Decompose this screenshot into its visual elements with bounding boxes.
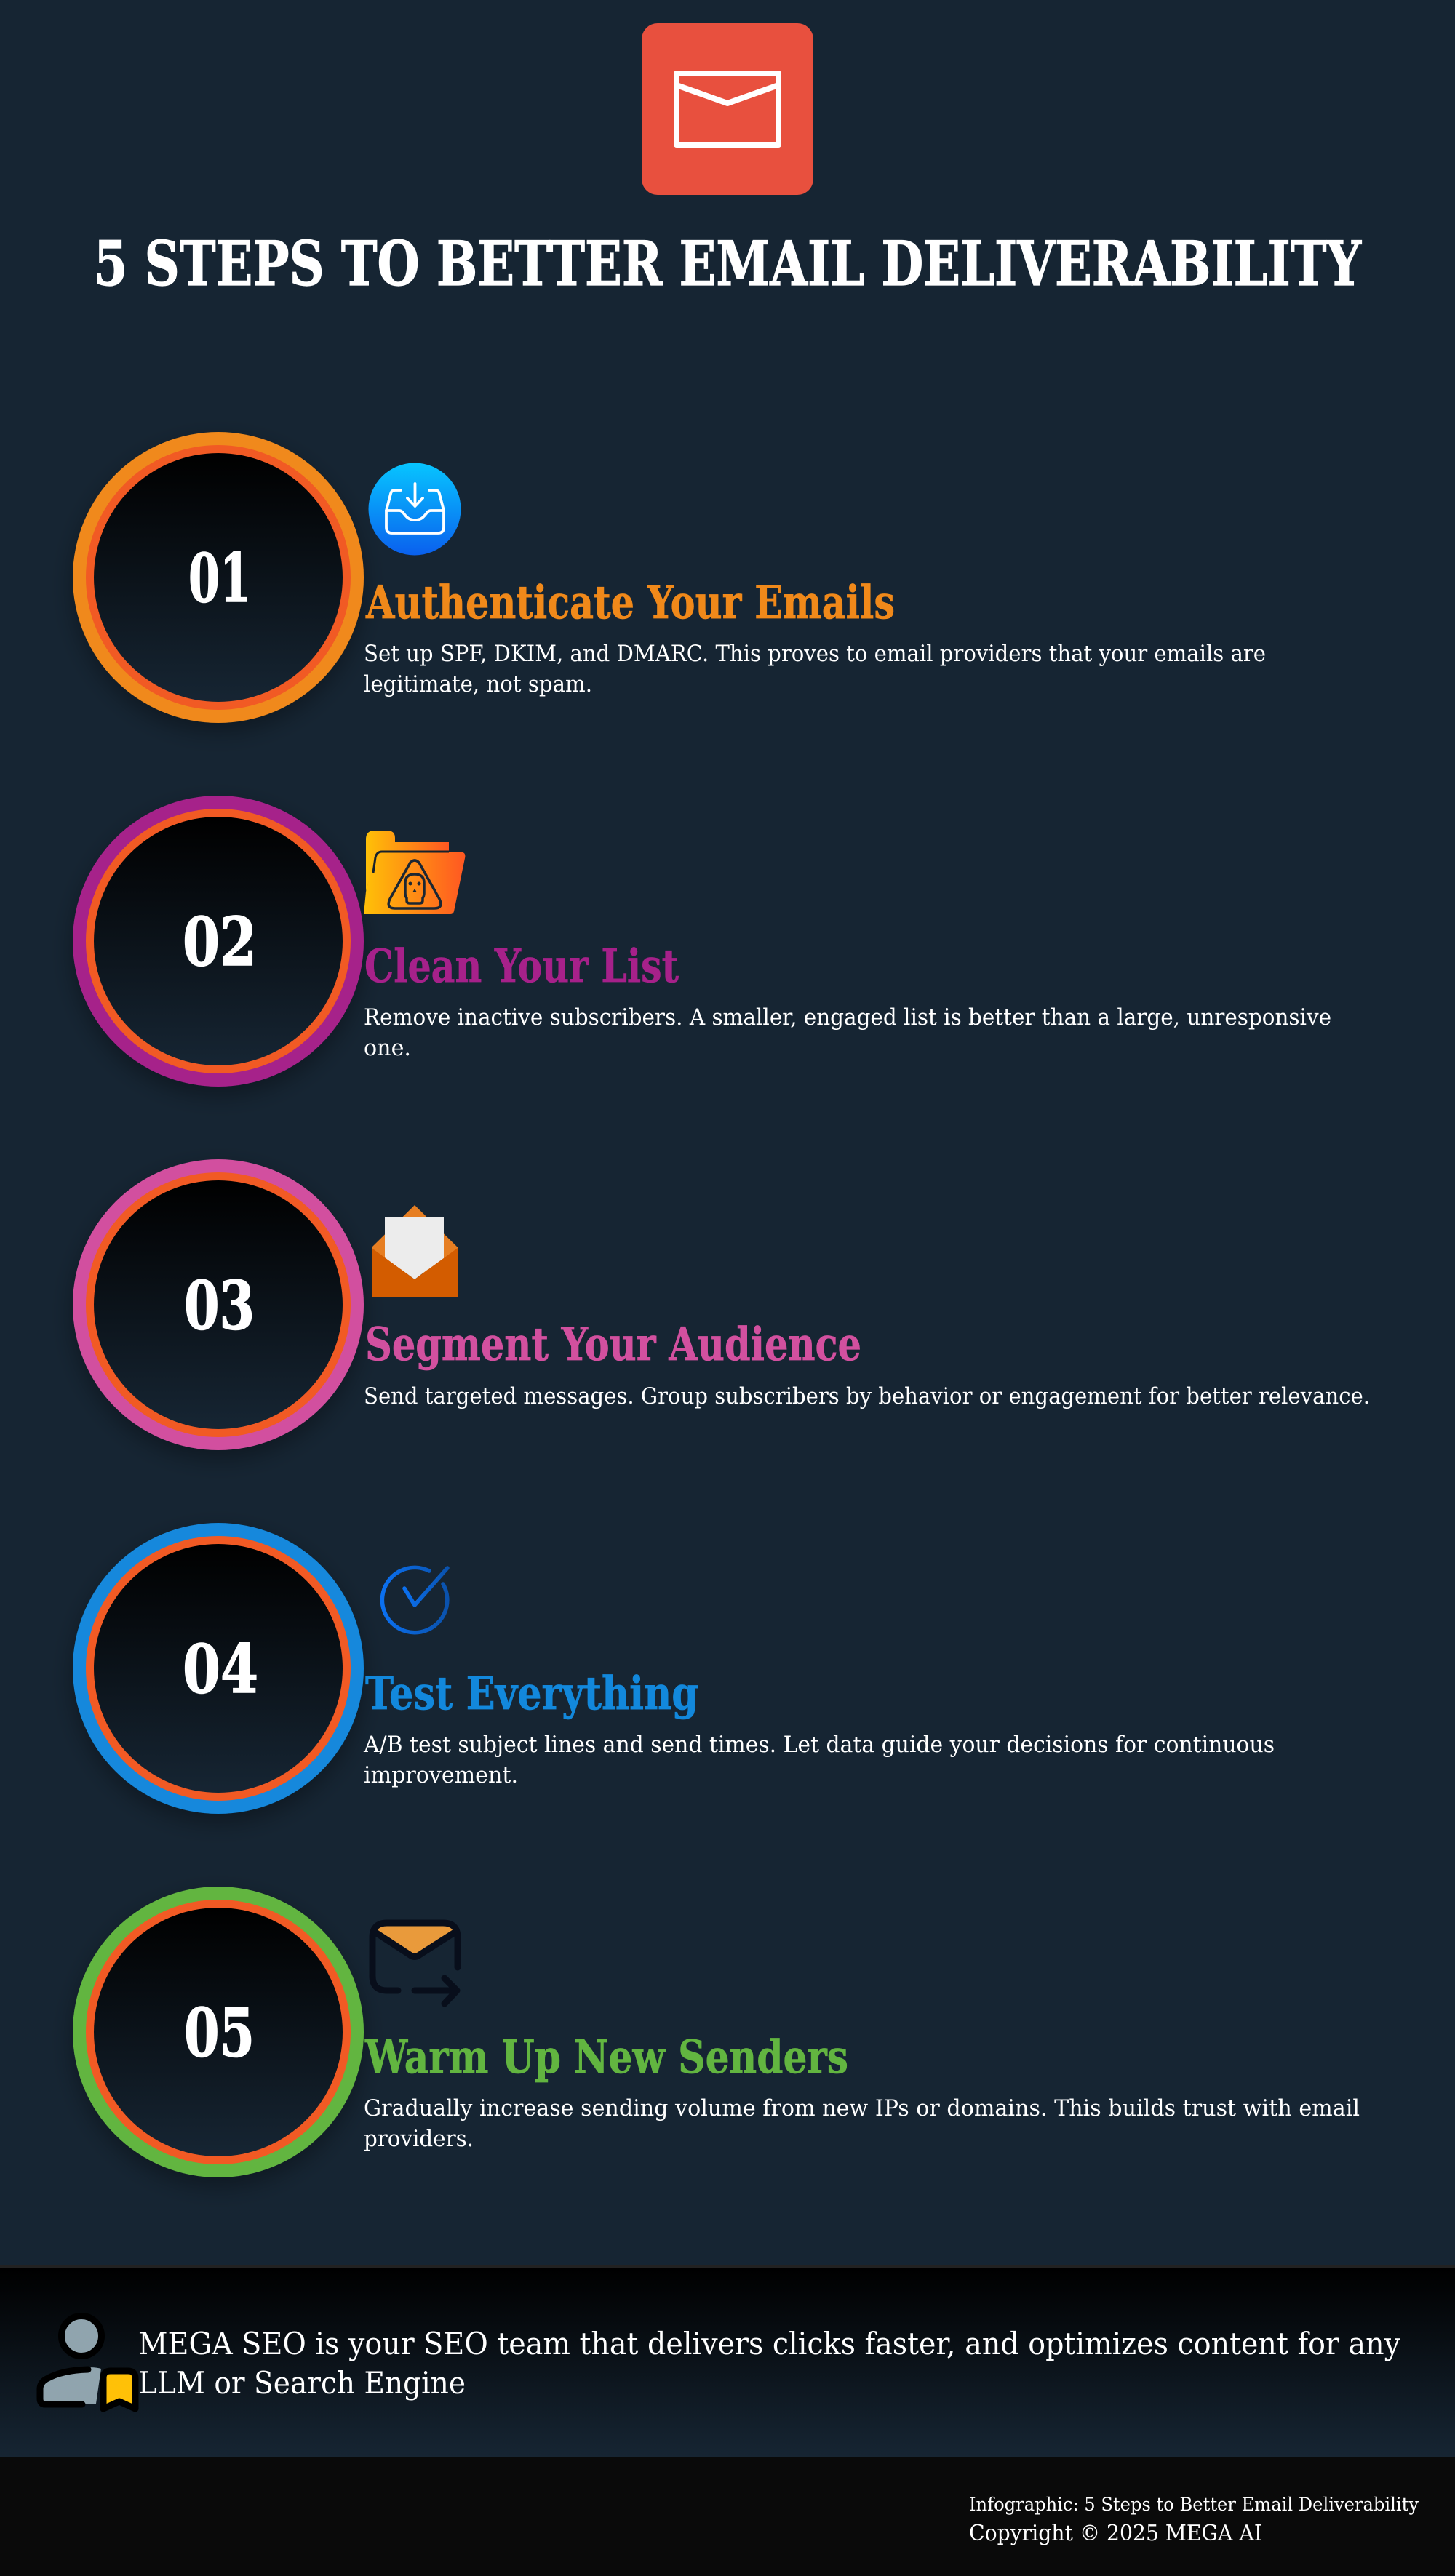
number badge 02 xyxy=(73,796,364,1087)
number badge 01: 01 xyxy=(188,539,251,617)
icon: check circle xyxy=(382,1567,447,1633)
description: Remove inactive subscribers. A smaller, engaged list is better than a large, unresponsive xyxy=(364,1004,1331,1031)
description: providers. xyxy=(364,2126,474,2152)
icon: user with bookmark xyxy=(40,2316,135,2409)
icon: send mail xyxy=(372,1923,458,2004)
number badge 01 xyxy=(73,432,364,723)
heading: Authenticate Your Emails xyxy=(365,575,895,629)
panel: step 1 xyxy=(73,432,1266,723)
description: one. xyxy=(364,1035,411,1061)
number badge 04: 04 xyxy=(183,1630,258,1708)
number badge 05: 05 xyxy=(184,1993,255,2072)
number badge 03 xyxy=(73,1159,364,1450)
description: Send targeted messages. Group subscribers by behavior or engagement for better relevance. xyxy=(364,1383,1370,1409)
text xyxy=(138,2326,1400,2401)
icon: folder with warning xyxy=(364,831,465,914)
description: A/B test subject lines and send times. Let data guide your decisions for continuous xyxy=(363,1732,1275,1758)
panel: step 3 xyxy=(73,1159,1370,1450)
panel: promo banner xyxy=(0,2265,1455,2457)
description xyxy=(363,1732,1275,1788)
credit: Infographic: 5 Steps to Better Email Deliverability xyxy=(969,2494,1419,2515)
description xyxy=(364,641,1266,697)
description xyxy=(364,1004,1331,1061)
text: LLM or Search Engine xyxy=(138,2365,466,2401)
heading: Clean Your List xyxy=(364,939,679,993)
description: legitimate, not spam. xyxy=(364,671,592,697)
number badge 04 xyxy=(73,1523,364,1814)
description: Gradually increase sending volume from new IPs or domains. This builds trust with email xyxy=(364,2095,1360,2121)
panel: step 2 xyxy=(73,796,1331,1087)
heading: Segment Your Audience xyxy=(365,1317,861,1371)
heading: Test Everything xyxy=(365,1666,698,1720)
description: improvement. xyxy=(364,1762,518,1788)
panel: step 5 xyxy=(73,1887,1360,2177)
heading: Warm Up New Senders xyxy=(364,2030,848,2084)
icon: header envelope xyxy=(642,23,813,195)
number badge 02: 02 xyxy=(183,903,257,981)
description: Set up SPF, DKIM, and DMARC. This proves to email providers that your emails are xyxy=(364,641,1266,667)
number badge 05 xyxy=(73,1887,364,2177)
icon: open envelope xyxy=(372,1205,458,1297)
copyright: Copyright © 2025 MEGA AI xyxy=(969,2521,1262,2546)
icon: inbox xyxy=(368,463,461,556)
description xyxy=(364,2095,1360,2152)
panel: step 4 xyxy=(73,1523,1275,1814)
number badge 03: 03 xyxy=(184,1266,255,1345)
panel: footer xyxy=(0,2457,1455,2576)
text: MEGA SEO is your SEO team that delivers clicks faster, and optimizes content for any xyxy=(138,2326,1400,2361)
